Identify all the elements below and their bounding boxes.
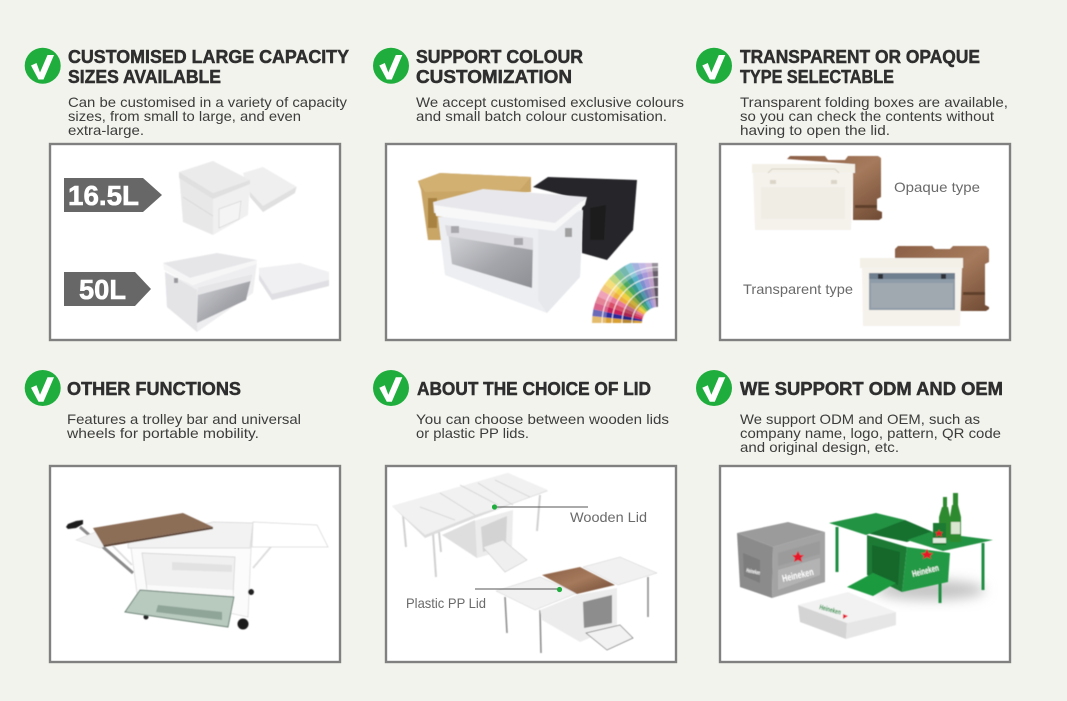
panel: capacity sizes <box>50 144 340 340</box>
panel: lid choices <box>386 466 676 662</box>
shadow under green table <box>875 580 985 600</box>
body text: We support ODM and OEM, such as <box>740 411 980 427</box>
panel: trolley <box>50 466 340 662</box>
folded white box <box>798 592 896 639</box>
body text: having to open the lid. <box>740 122 890 138</box>
arrow label 50L: 50L <box>79 274 126 305</box>
black box <box>533 177 637 260</box>
grey branded box: Heineken <box>746 568 761 577</box>
heading: customised large capacity: CUSTOMISED LARGE CAPACITY <box>68 46 350 67</box>
section: colour customization <box>373 48 684 342</box>
body text: Features a trolley bar and universal <box>67 411 301 427</box>
callout: plastic PP lid: Plastic PP Lid <box>406 595 486 611</box>
body text: Can be customised in a variety of capacity <box>68 94 347 110</box>
trolley box illustration <box>66 513 328 630</box>
body text <box>740 94 1008 138</box>
icon: green check <box>25 370 61 406</box>
heading: ODM and OEM: WE SUPPORT ODM AND OEM <box>740 378 1003 399</box>
panel: branded boxes <box>720 466 1010 662</box>
heading: support colour <box>416 46 584 87</box>
table with wooden top <box>496 557 657 653</box>
body text <box>66 411 301 441</box>
white box with window <box>433 189 587 313</box>
section: other functions <box>25 370 340 662</box>
body text: You can choose between wooden lids <box>416 411 669 427</box>
body text: or plastic PP lids. <box>416 425 529 441</box>
icon: green check <box>373 48 409 84</box>
large box with folded box <box>163 253 329 332</box>
body text <box>416 94 684 124</box>
green table with bottles: Heineken <box>911 563 940 579</box>
heading: customised large capacity <box>68 46 350 87</box>
panel: colours <box>384 142 678 342</box>
heading: customised large capacity: SIZES AVAILABLE <box>68 66 221 87</box>
folded white box: Heineken <box>818 604 842 617</box>
section: ODM and OEM <box>696 370 1010 662</box>
table with plastic top <box>392 473 548 577</box>
heading: support colour: CUSTOMIZATION <box>416 66 572 87</box>
body text: company name, logo, pattern, QR code <box>740 425 1001 441</box>
green table with bottles <box>829 493 993 603</box>
tan box <box>418 173 531 240</box>
callout: wooden lid <box>492 504 647 525</box>
body text <box>68 94 347 138</box>
heading: about the choice of lid: ABOUT THE CHOICE OF LID <box>417 378 651 399</box>
heading: transparent or opaque <box>740 46 980 87</box>
heading: transparent or opaque: TYPE SELECTABLE <box>740 66 894 87</box>
body text <box>740 411 1001 455</box>
heading: other functions: OTHER FUNCTIONS <box>67 378 241 399</box>
small box with folded box <box>179 161 297 235</box>
heading: transparent or opaque: TRANSPARENT OR OPAQUE <box>740 46 980 67</box>
body text: We accept customised exclusive colours <box>416 94 684 110</box>
section: large capacity <box>25 46 350 340</box>
label: opaque type: Opaque type <box>894 179 980 195</box>
body text <box>416 411 669 441</box>
arrow label 16.5L <box>64 178 162 212</box>
body text: wheels for portable mobility. <box>66 425 259 441</box>
label: transparent type: Transparent type <box>743 281 853 297</box>
body text: Transparent folding boxes are available, <box>740 94 1008 110</box>
icon: green check <box>696 48 732 84</box>
body text: and original design, etc. <box>740 439 899 455</box>
icon: green check <box>373 370 409 406</box>
icon: green check <box>25 48 61 84</box>
arrow label 50L <box>64 272 151 306</box>
transparent box with wooden lid <box>860 246 989 326</box>
section: transparent or opaque <box>696 46 1010 340</box>
body text: and small batch colour customisation. <box>416 108 667 124</box>
opaque box with wooden lid <box>752 156 882 230</box>
callout: wooden lid: Wooden Lid <box>570 509 647 525</box>
section: choice of lid <box>373 370 676 662</box>
body text: so you can check the contents without <box>740 108 994 124</box>
colour fan <box>591 262 659 324</box>
body text: extra-large. <box>68 122 144 138</box>
icon: green check <box>696 370 732 406</box>
grey branded box: Heineken <box>781 567 815 585</box>
arrow label 16.5L: 16.5L <box>68 180 139 211</box>
panel: box types <box>720 144 1010 340</box>
heading: support colour: SUPPORT COLOUR <box>416 46 584 67</box>
callout: plastic PP lid <box>406 587 562 611</box>
grey branded box <box>737 522 825 598</box>
body text: sizes, from small to large, and even <box>68 108 301 124</box>
